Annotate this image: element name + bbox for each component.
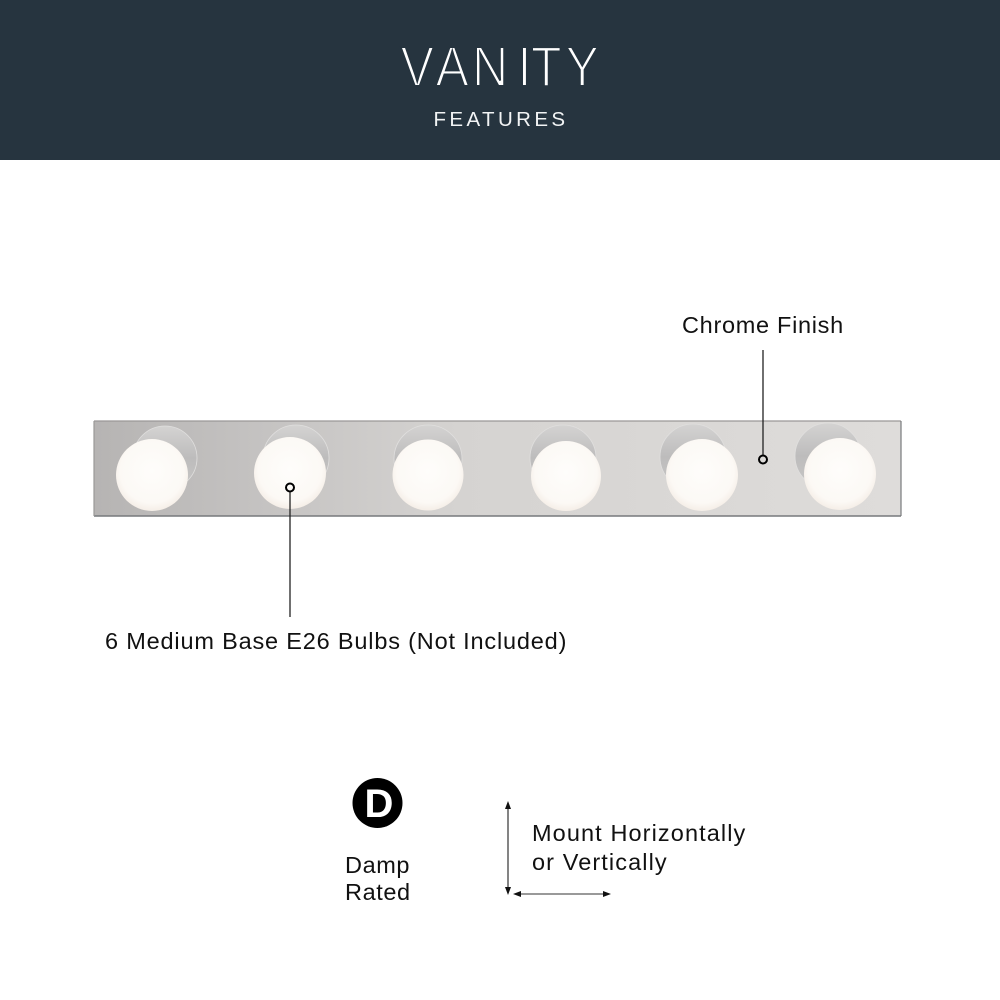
subtitle: FEATURES bbox=[433, 108, 569, 131]
mount label bbox=[532, 820, 746, 875]
icon: mounting arrows bbox=[505, 801, 611, 897]
icon: damp rated: D bbox=[365, 782, 393, 826]
icon: damp rated bbox=[345, 778, 411, 905]
mount label: Mount Horizontally bbox=[532, 820, 746, 846]
header banner bbox=[0, 0, 1000, 160]
damp rated label: Damp bbox=[345, 852, 410, 878]
mount label: or Vertically bbox=[532, 849, 668, 875]
product: vanity light bar bbox=[94, 421, 901, 516]
callout: chrome finish: Chrome Finish bbox=[682, 312, 844, 338]
callout: chrome finish bbox=[682, 312, 844, 464]
title: VANITY bbox=[400, 35, 599, 99]
icon: damp rated: Rated bbox=[345, 879, 411, 905]
chrome plate bbox=[94, 421, 901, 516]
callout: bulbs bbox=[105, 484, 567, 654]
bulbs bbox=[116, 437, 876, 511]
callout: bulbs: 6 Medium Base E26 Bulbs (Not Included) bbox=[105, 628, 567, 654]
bulb sockets bbox=[133, 423, 861, 493]
